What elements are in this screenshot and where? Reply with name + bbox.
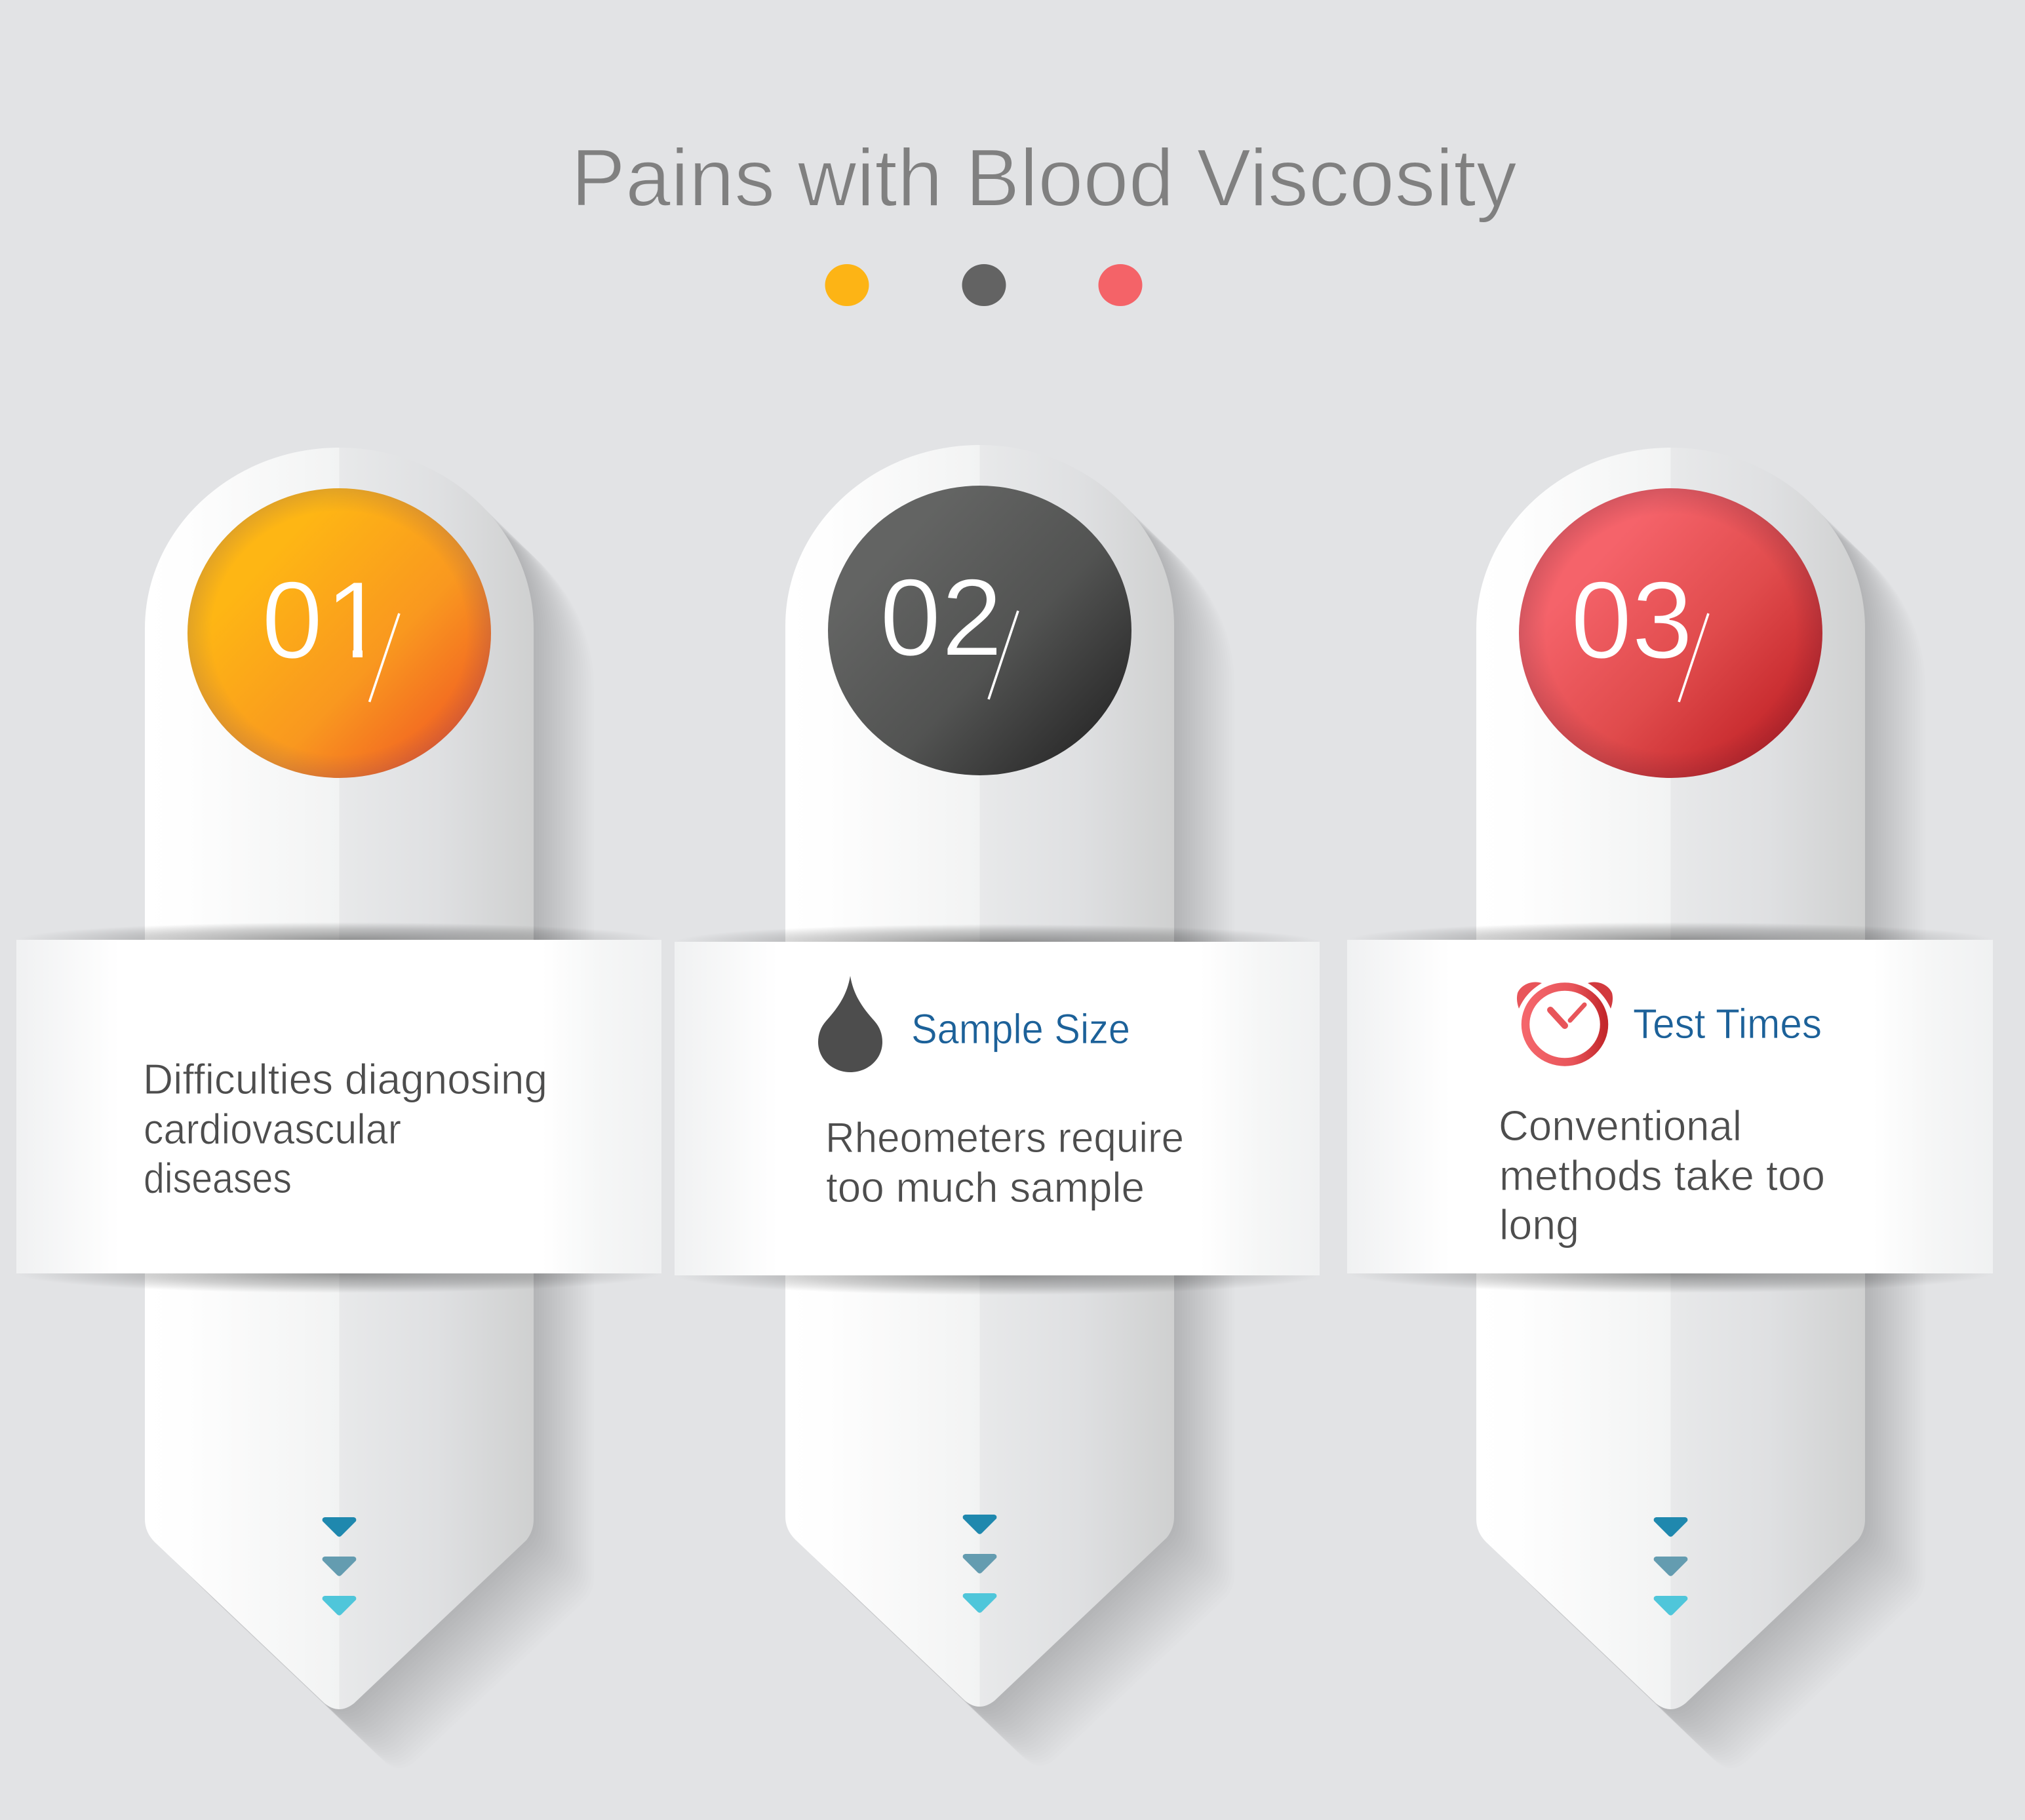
chevron arrows: [323, 1517, 356, 1616]
text band: [675, 942, 1320, 1275]
icon: blood drop: [818, 976, 882, 1072]
pillar shadow: [788, 448, 1234, 1766]
title: Pains with Blood Viscosity: [571, 133, 1517, 223]
description text: [1499, 1102, 1825, 1249]
band top shadow: [16, 922, 661, 958]
description text: methods take too: [1499, 1152, 1825, 1199]
description text: long: [1499, 1201, 1579, 1249]
band top shadow: [675, 924, 1320, 959]
description text: Difficulties diagnosing: [143, 1055, 547, 1103]
description text: too much sample: [826, 1163, 1145, 1211]
band bottom shadow: [675, 1256, 1320, 1295]
icon: alarm clock: [1517, 982, 1613, 1062]
panel: column 1: [16, 448, 661, 1768]
text band: [1347, 940, 1993, 1273]
dot: yellow: [825, 264, 869, 306]
chevron arrows: [1654, 1517, 1687, 1616]
number 01: 01: [262, 558, 386, 682]
pillar shadow: [147, 450, 594, 1768]
title dots: [825, 264, 1142, 306]
description text: cardiovascular: [144, 1105, 401, 1153]
pillar shadow: [1479, 450, 1925, 1768]
slash: [370, 613, 399, 702]
badge circle 03: [1519, 488, 1822, 778]
band bottom shadow: [1348, 1254, 1993, 1293]
dot: gray: [962, 264, 1006, 306]
band bottom shadow: [16, 1254, 661, 1293]
heading: test times: Test Times: [1633, 1000, 1822, 1047]
description text: diseases: [144, 1154, 292, 1202]
description text: Rheometers require: [825, 1113, 1184, 1161]
number 03: 03: [1571, 558, 1693, 682]
slash: [1679, 613, 1708, 702]
badge circle 01: [187, 488, 491, 778]
description text: [143, 1055, 547, 1202]
band top shadow: [1348, 922, 1993, 958]
chevron arrows: [963, 1515, 996, 1613]
pillar: [785, 445, 1174, 1707]
text band: [16, 940, 661, 1273]
badge circle 02: [828, 486, 1131, 775]
description text: Conventional: [1499, 1102, 1742, 1150]
description text: [825, 1113, 1184, 1211]
slash: [989, 611, 1018, 699]
dot: red: [1099, 264, 1142, 306]
pillar: [145, 448, 534, 1709]
heading: sample size: Sample Size: [911, 1005, 1130, 1053]
number 02: 02: [880, 556, 1002, 679]
panel: column 2: [675, 445, 1320, 1766]
panel: column 3: [1347, 448, 1993, 1768]
pillar: [1476, 448, 1865, 1709]
